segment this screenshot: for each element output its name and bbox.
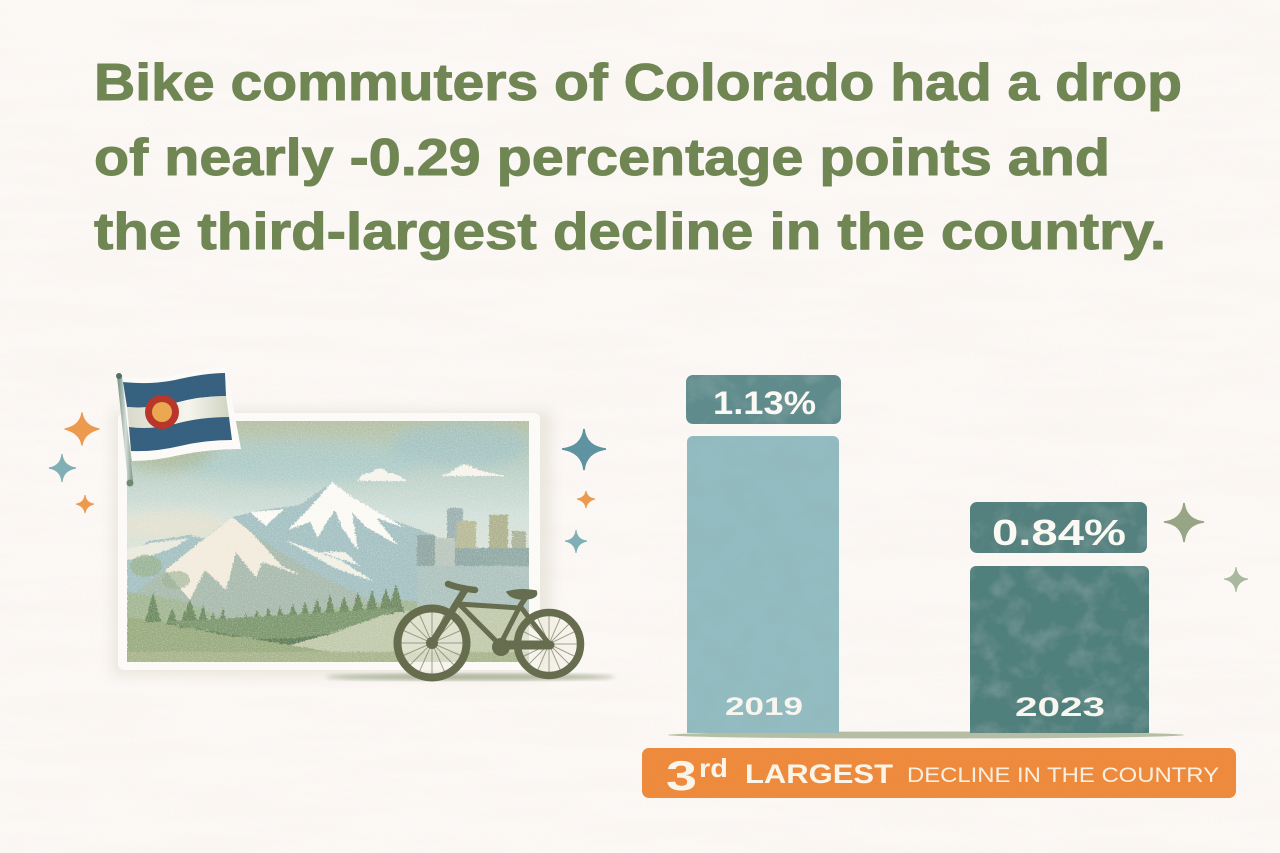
landscape picture	[110, 415, 536, 667]
callout: 3rd largest decline: DECLINE IN THE COUNTRY	[907, 764, 1219, 787]
title: Bike commuters of Colorado had a drop	[94, 54, 1182, 112]
far ridge	[127, 482, 529, 611]
bar: 2023: 0.84%	[992, 512, 1126, 553]
near mountain	[136, 518, 378, 619]
title: the third-largest decline in the country.	[94, 203, 1166, 261]
skyline	[417, 508, 531, 608]
meadow	[290, 607, 529, 653]
far peak snow	[288, 482, 405, 550]
callout: 3rd largest decline: 3	[666, 752, 697, 799]
title: of nearly -0.29 percentage points and	[94, 129, 1110, 187]
postcard frame	[112, 410, 552, 676]
icon: Colorado flag	[116, 367, 241, 486]
bar: 2019: 1.13%	[713, 385, 816, 421]
foothills	[127, 592, 529, 623]
callout: 3rd largest decline	[642, 748, 1236, 799]
pine trees	[145, 584, 404, 636]
sparkles around illustration	[49, 413, 1248, 592]
bar: 2019: 2019	[725, 693, 803, 721]
bar chart	[668, 375, 1184, 738]
bar: 2023: 2023	[1015, 692, 1105, 722]
bar: 2019	[686, 375, 841, 733]
title	[94, 54, 1182, 261]
icon: bicycle	[325, 584, 615, 680]
chart baseline shadow	[668, 732, 1184, 738]
illustration: Colorado landscape postcard with flag and bicycle	[110, 367, 615, 680]
callout: 3rd largest decline: rd	[699, 753, 728, 783]
callout: 3rd largest decline: LARGEST	[745, 759, 894, 789]
bar: 2023	[970, 502, 1149, 733]
